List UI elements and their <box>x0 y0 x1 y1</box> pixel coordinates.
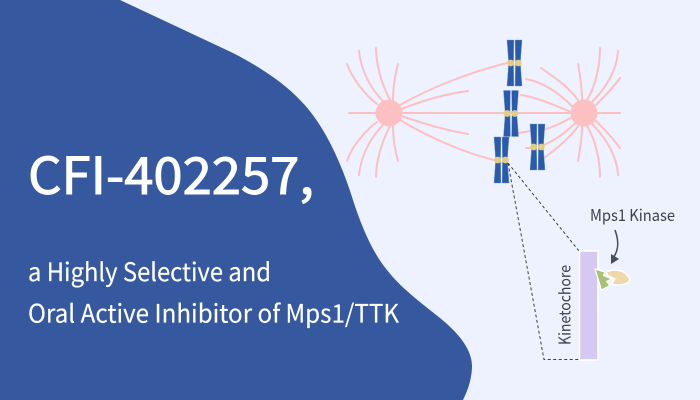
right spindle pole <box>570 100 598 126</box>
chromosome 1 <box>507 40 522 86</box>
dashed zoom lines <box>508 163 579 360</box>
icon: Mps1 kinase <box>595 269 630 290</box>
subtitle line 1: a Highly Selective and <box>28 253 271 289</box>
chromosome 4 <box>494 137 509 183</box>
chromosome 3 <box>530 124 545 170</box>
panel: blue curved title area <box>0 0 472 400</box>
Mps1 kinase label: Mps1 Kinase <box>590 202 675 226</box>
left spindle pole <box>376 100 402 126</box>
title: CFI-402257, <box>28 135 314 209</box>
kinetochore bar <box>580 251 598 360</box>
kinetochore label: Kinetochore <box>552 265 576 345</box>
arrow to kinase <box>611 230 619 264</box>
subtitle line 2: Oral Active Inhibitor of Mps1/TTK <box>28 294 400 330</box>
diagram: spindle fibres <box>347 48 620 177</box>
chromosome 2 <box>504 90 518 136</box>
right aster fibres <box>519 48 620 177</box>
left aster fibres <box>347 48 584 177</box>
